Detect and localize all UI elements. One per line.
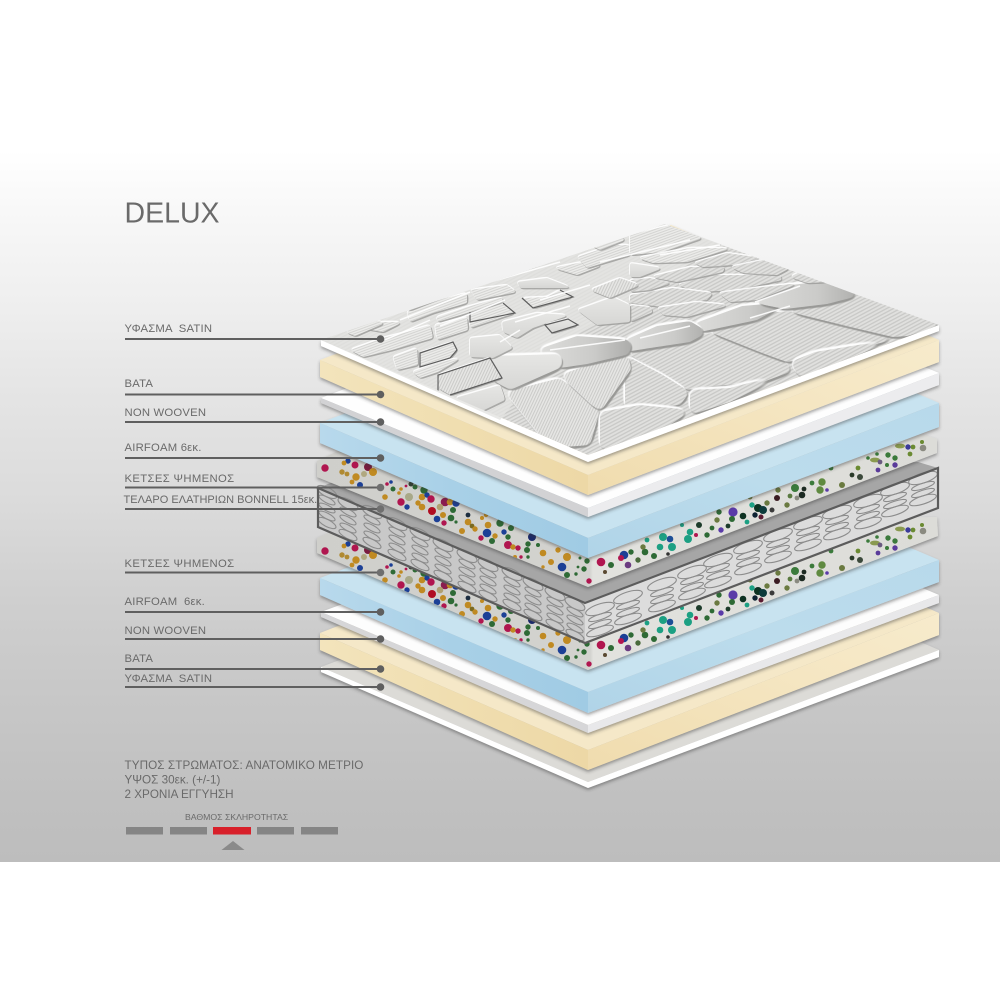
leader: lower felt (125, 569, 384, 576)
leader: airfoam (125, 454, 384, 462)
layer: top airfoam (320, 288, 939, 558)
leader: lower non woven (125, 635, 384, 643)
product details text: ΤΥΠΟΣ ΣΤΡΩΜΑΤΟΣ: ΑΝΑΤΟΜΙΚΟ ΜΕΤΡΙΟ (124, 759, 363, 772)
spring frame outline (318, 468, 938, 643)
layer: top non woven (321, 263, 939, 517)
label: spring unit: ΤΕΛΑΡΟ ΕΛΑΤΗΡΙΩΝ BONNELL 15εκ. (124, 494, 317, 506)
label: felt: ΚΕΤΣΕΣ ΨΗΜΕΝΟΣ (124, 473, 234, 485)
leader: satin (125, 335, 384, 343)
label: non woven: NON WOOVEN (124, 407, 206, 419)
leader lines and dots (125, 335, 384, 691)
layer: bonnell spring frame (315, 462, 939, 643)
layer labels (124, 323, 317, 685)
product details text: ΥΨΟΣ 30εκ. (+/-1) (124, 774, 221, 786)
leader: batting (125, 391, 384, 398)
label: lower batting: ΒΑΤΑ (124, 653, 153, 665)
layer: bottom batting (320, 496, 939, 770)
leader: lower airfoam (125, 608, 384, 616)
product details text (124, 759, 363, 801)
fabric highlights (385, 228, 800, 350)
layer: top satin fabric (321, 224, 945, 462)
firmness scale (126, 812, 338, 850)
label: lower satin: ΥΦΑΣΜΑ SATIN (124, 673, 212, 685)
leader: felt (125, 484, 384, 491)
label: lower airfoam: AIRFOAM 6εκ. (124, 596, 205, 608)
quilted pebble texture (345, 225, 945, 450)
label: batting: ΒΑΤΑ (124, 378, 153, 390)
label: airfoam: AIRFOAM 6εκ. (124, 442, 202, 454)
small quilted tiles (345, 225, 830, 412)
title: DELUX (124, 198, 220, 230)
spring coils right face (584, 469, 939, 639)
leader: non woven (125, 418, 384, 426)
layer: bottom felt with speckles (317, 517, 938, 670)
layer: bottom airfoam (320, 446, 939, 713)
label: satin: ΥΦΑΣΜΑ SATIN (124, 323, 212, 335)
spring coils left face (315, 483, 587, 643)
leader: lower satin (125, 683, 384, 691)
quilting seam marks (420, 290, 578, 395)
layer: top felt with speckles (317, 432, 937, 587)
product details text: 2 ΧΡΟΝΙΑ ΕΓΓΥΗΣΗ (124, 788, 234, 801)
label: lower felt: ΚΕΤΣΕΣ ΨΗΜΕΝΟΣ (124, 558, 234, 570)
label: lower non woven: NON WOOVEN (124, 625, 206, 637)
firmness scale: ΒΑΘΜΟΣ ΣΚΛΗΡΟΤΗΤΑΣ (185, 812, 289, 822)
layer: top batting (320, 225, 939, 495)
layer: bottom satin fabric (321, 535, 939, 788)
leader: spring unit (125, 505, 384, 513)
leader: lower batting (125, 665, 384, 673)
layer: bottom non woven (321, 482, 939, 733)
